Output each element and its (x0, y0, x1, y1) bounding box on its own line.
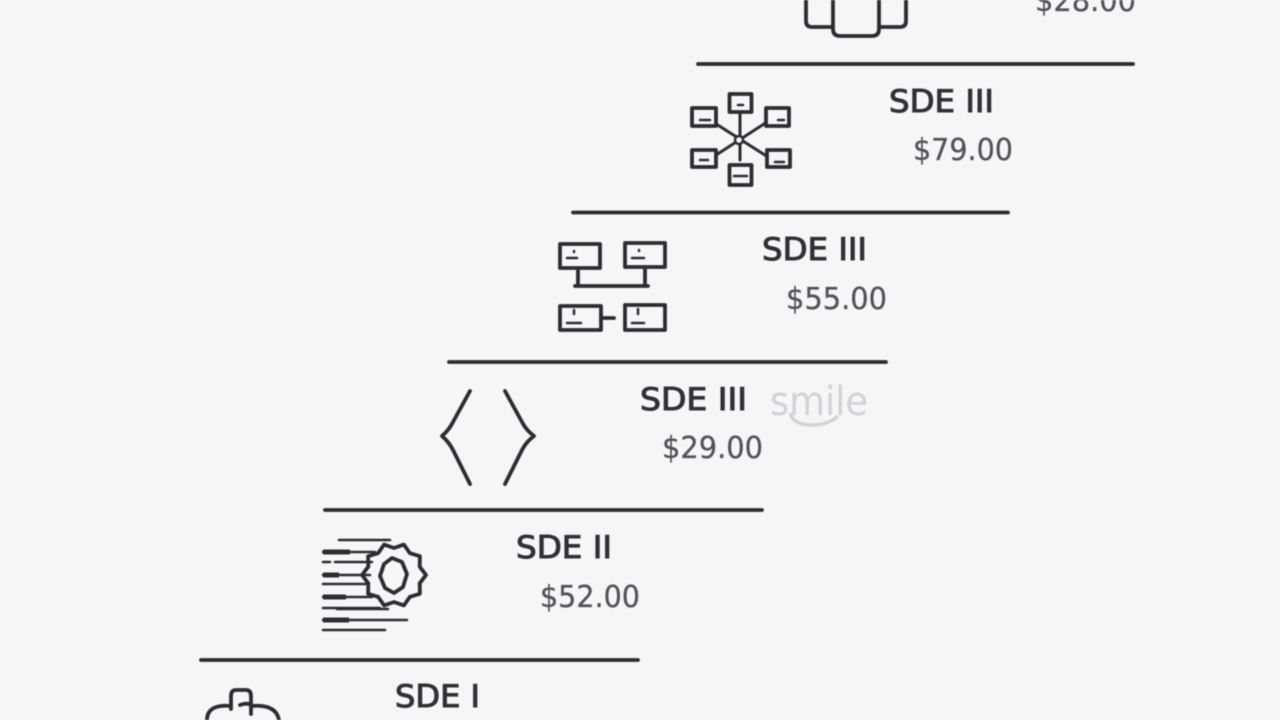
title: SDE III (640, 382, 747, 418)
step line (449, 360, 886, 364)
step: top partially cropped level (698, 0, 1136, 64)
price: $79.00 (913, 133, 1013, 168)
step line (698, 62, 1133, 66)
price: $29.00 (662, 431, 763, 466)
price: $55.00 (786, 282, 887, 317)
icon: hub network (692, 94, 790, 185)
step: SDE I (207, 679, 480, 720)
step line (201, 658, 638, 662)
icon: gear with speed lines (323, 540, 426, 630)
price: $52.00 (540, 580, 640, 615)
title: SDE I (395, 679, 480, 715)
icon: overlapping cards (806, 0, 906, 36)
watermark: smile: smile (770, 379, 868, 425)
step: SDE III, $79.00 (573, 84, 1013, 212)
step: SDE III, $29.00 (325, 379, 868, 510)
step: SDE II, $52.00 (201, 530, 640, 660)
step line (573, 211, 1008, 214)
icon: connected monitors (560, 243, 665, 330)
step line (325, 508, 762, 512)
step: SDE III, $55.00 (449, 232, 887, 362)
title: SDE III (762, 232, 867, 268)
title: SDE II (516, 530, 612, 566)
title: SDE III (889, 84, 994, 120)
icon: code angle brackets (442, 391, 534, 484)
icon: cropped pumpkin shape (207, 690, 279, 720)
